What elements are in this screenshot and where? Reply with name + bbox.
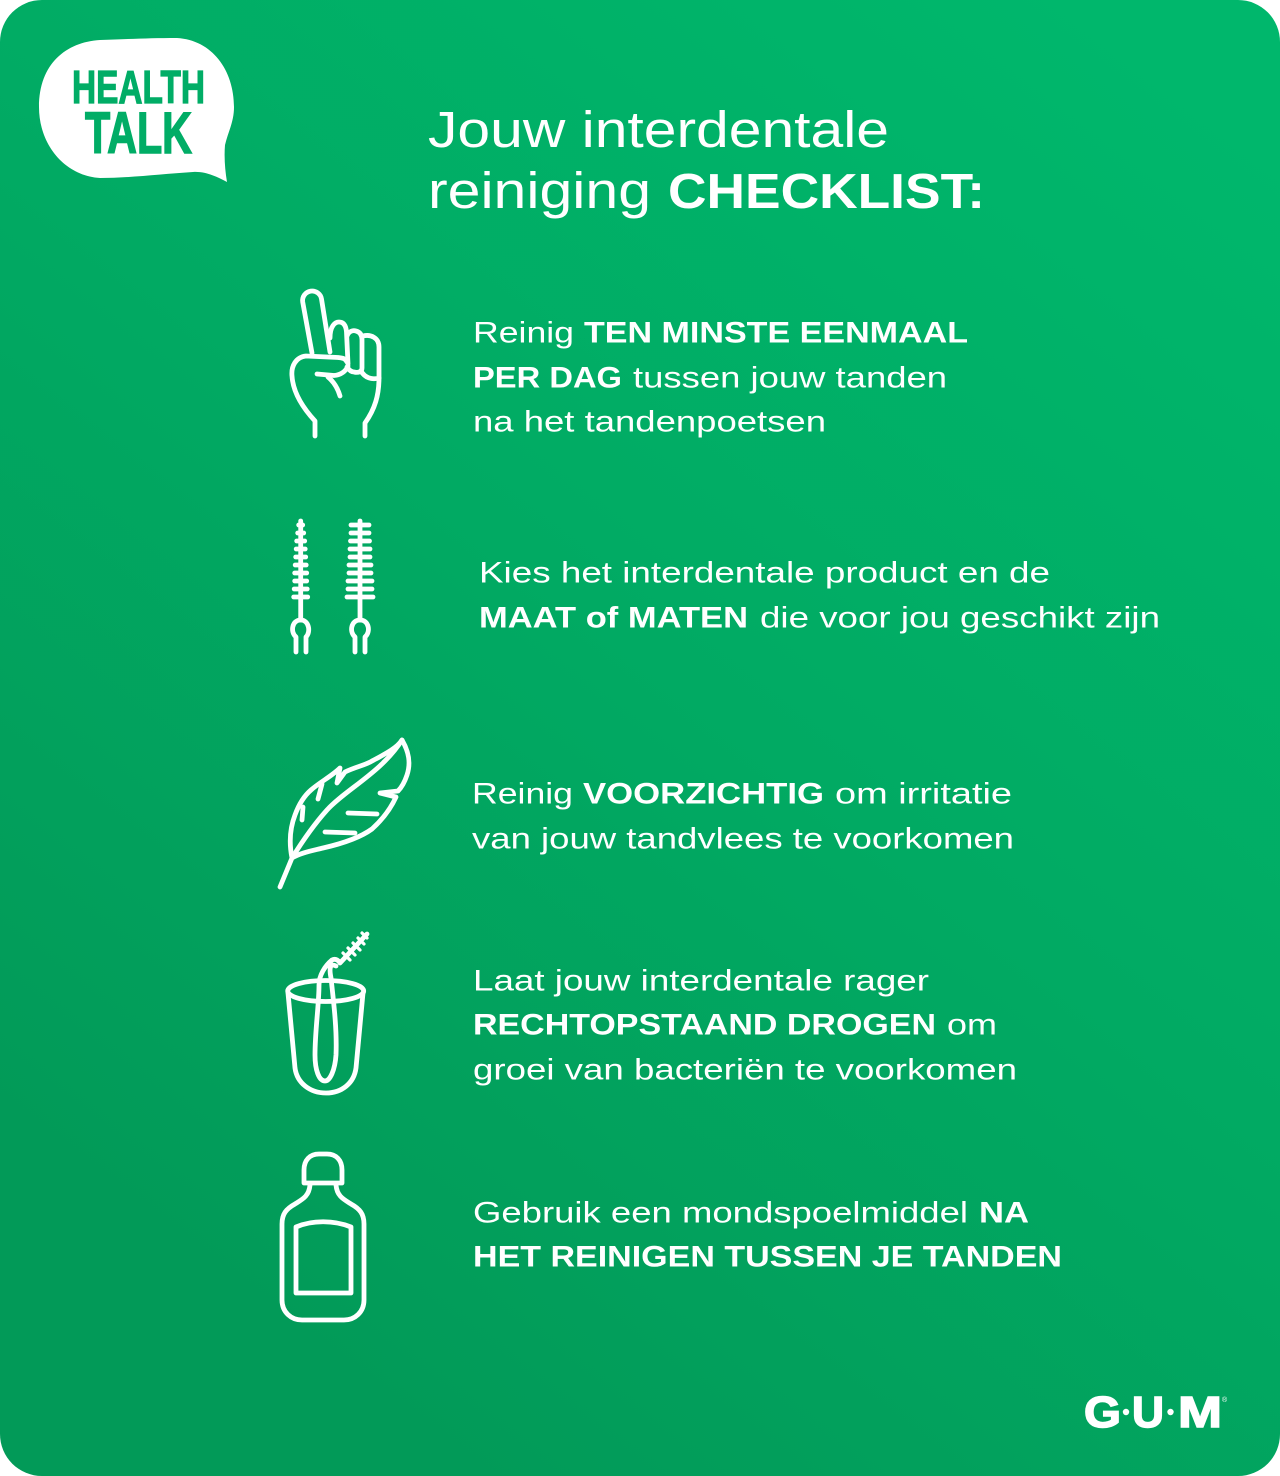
text: use mouthwash: NA xyxy=(979,1196,1029,1230)
text: choose product and size: die voor jou geschikt zijn xyxy=(760,602,1160,634)
text: choose product and size: Kies het interdentale product en de xyxy=(479,556,1050,590)
logo: Health Talk speech bubble: HEALTH xyxy=(72,61,205,113)
text: daily cleaning: Reinig xyxy=(473,316,574,350)
text: use mouthwash xyxy=(473,1196,1062,1274)
text: daily cleaning xyxy=(473,316,968,438)
icon: brush in glass xyxy=(288,933,367,1093)
logo: GUM xyxy=(1084,1388,1228,1437)
text: dry upright: RECHTOPSTAAND DROGEN xyxy=(473,1008,936,1042)
logo: GUM: U xyxy=(1132,1388,1164,1437)
logo: Health Talk speech bubble: TALK xyxy=(85,101,192,166)
text: dry upright xyxy=(473,964,1017,1086)
text: clean gently xyxy=(472,778,1014,856)
icon: hand with raised finger xyxy=(292,291,379,436)
title: Jouw interdentale xyxy=(428,101,889,158)
logo: Health Talk speech bubble xyxy=(39,38,234,182)
text: daily cleaning: na het tandenpoetsen xyxy=(473,406,826,438)
icon: mouthwash bottle xyxy=(282,1154,364,1320)
logo: GUM: ® xyxy=(1222,1396,1228,1404)
text: daily cleaning: tussen jouw tanden xyxy=(633,362,947,394)
text: use mouthwash: Gebruik een mondspoelmiddel xyxy=(473,1196,968,1230)
text: clean gently: VOORZICHTIG xyxy=(583,778,824,810)
icon: feather xyxy=(280,740,409,887)
text: clean gently: om irritatie xyxy=(835,778,1012,810)
text: dry upright: Laat jouw interdentale rager xyxy=(473,964,929,998)
icon: interdental brushes xyxy=(293,521,373,652)
text: choose product and size: MAAT of MATEN xyxy=(479,602,748,634)
text: clean gently: van jouw tandvlees te voorkomen xyxy=(472,822,1014,856)
text: daily cleaning: TEN MINSTE EENMAAL xyxy=(584,316,968,350)
text: use mouthwash: HET REINIGEN TUSSEN JE TANDEN xyxy=(473,1240,1062,1274)
title xyxy=(428,101,985,219)
logo: GUM: G xyxy=(1084,1388,1121,1437)
logo: GUM: M xyxy=(1178,1388,1222,1437)
text: choose product and size xyxy=(479,556,1160,634)
text: dry upright: groei van bacteriën te voorkomen xyxy=(473,1054,1017,1086)
text: dry upright: om xyxy=(947,1008,997,1042)
text: clean gently: Reinig xyxy=(472,778,573,810)
title: CHECKLIST: xyxy=(668,165,985,219)
title: reiniging xyxy=(428,162,651,219)
text: daily cleaning: PER DAG xyxy=(473,362,622,394)
